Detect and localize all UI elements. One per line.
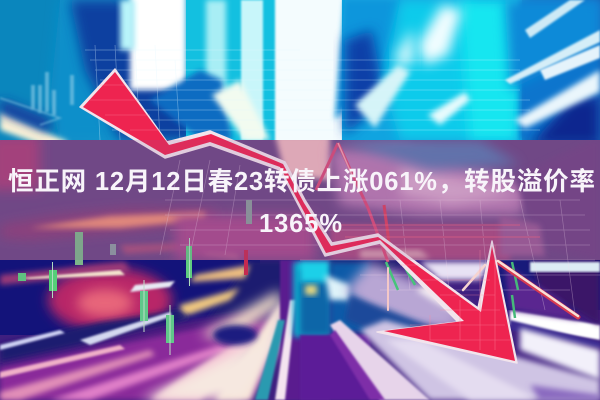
candles: green candlesticks bbox=[18, 200, 518, 355]
red line: thin peak behind ribbon bbox=[246, 143, 390, 275]
title bbox=[8, 168, 595, 238]
grid lines: upper chart bbox=[85, 45, 540, 140]
background: lower road light streaks bbox=[0, 260, 600, 400]
background: top city sky bbox=[0, 0, 600, 152]
background: purple band scene bbox=[0, 135, 600, 260]
grid lines: band and lower chart bbox=[160, 160, 600, 315]
title: 恒正网 12月12日春23转债上涨061%，转股溢价率 bbox=[8, 168, 595, 196]
thin white-red lines around arrow head bbox=[388, 261, 578, 317]
title overlay band tint bbox=[0, 140, 600, 260]
title: 1365% bbox=[259, 210, 342, 238]
red arrow ribbon trending down bbox=[80, 69, 517, 363]
candles: faint upper left bbox=[0, 72, 74, 125]
